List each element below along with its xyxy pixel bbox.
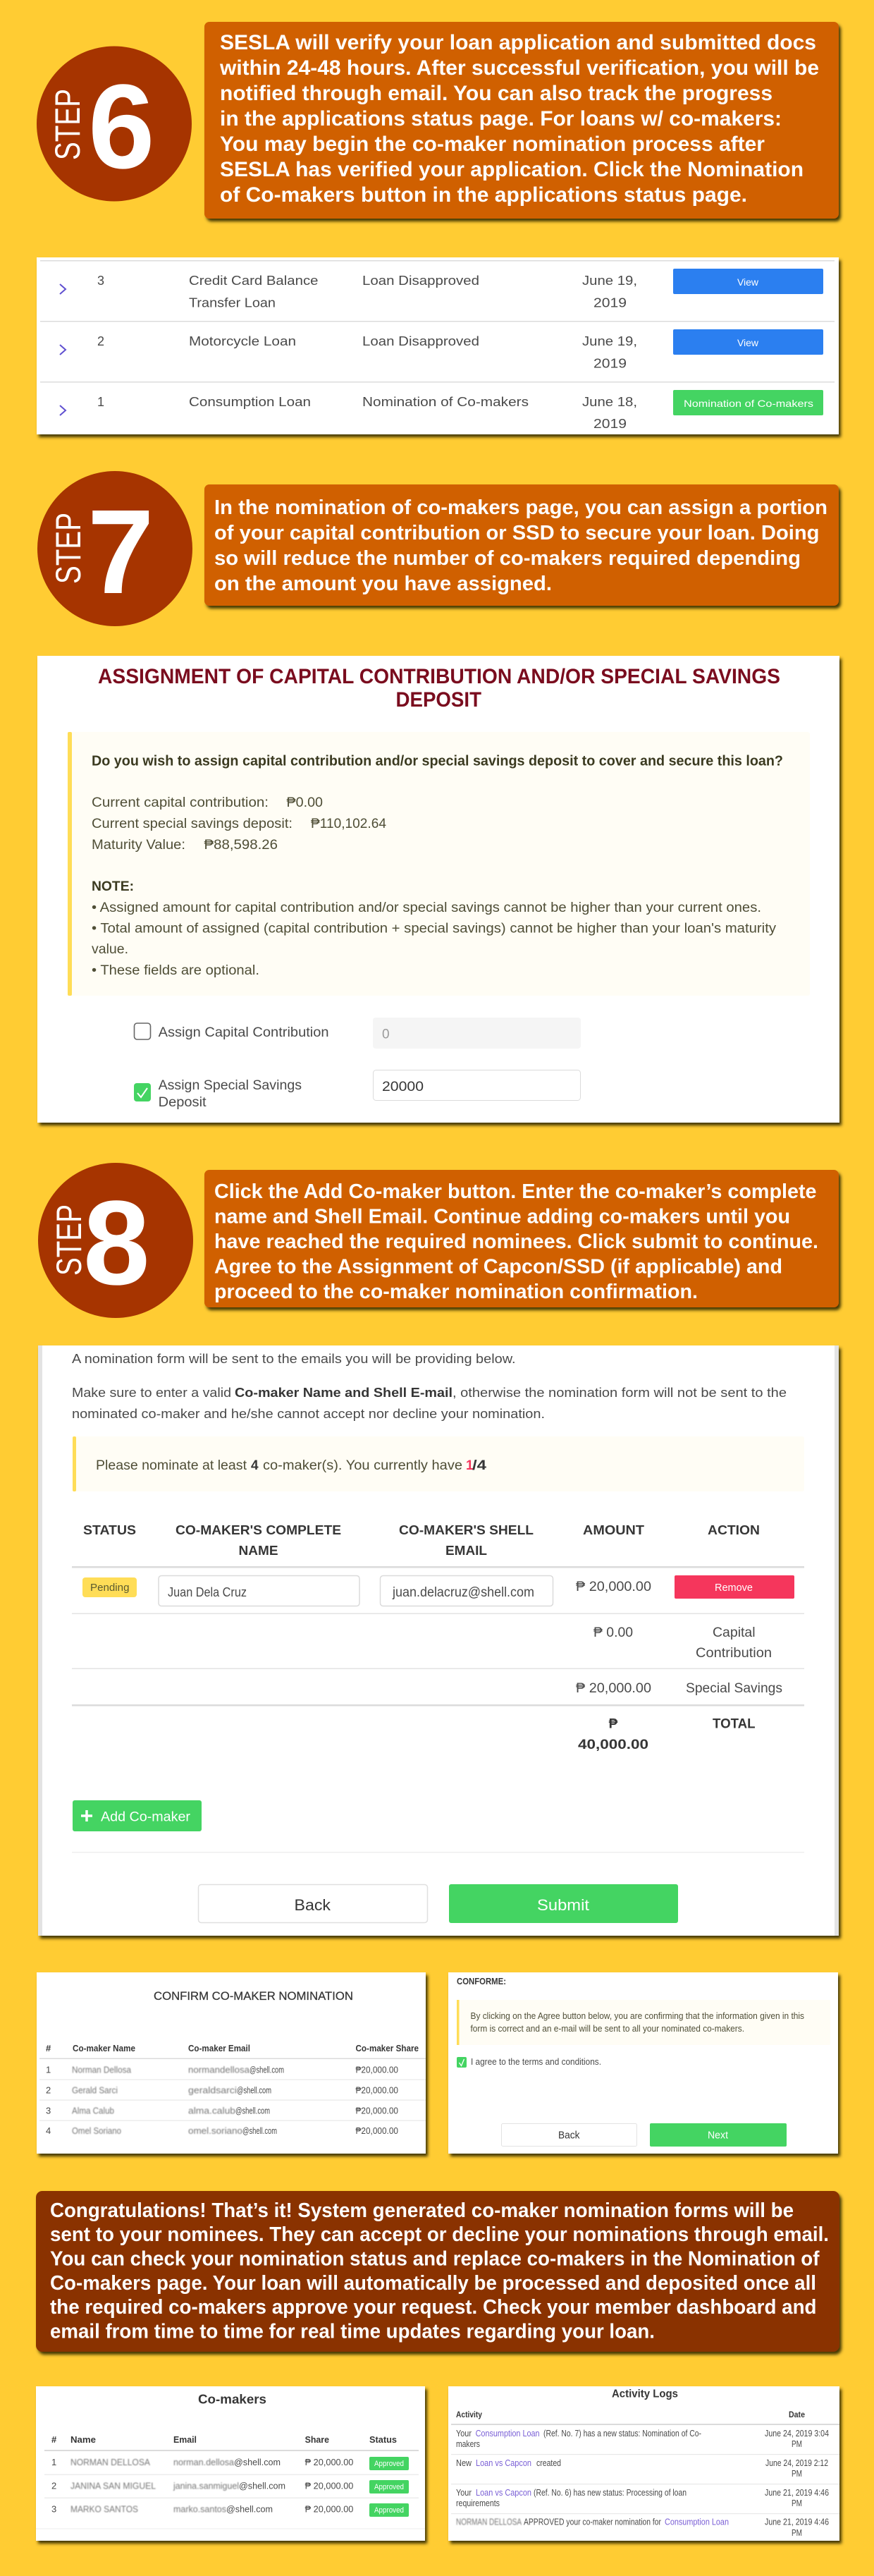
table row: pending co-maker: Remove (715, 1582, 753, 1594)
table row 2: @shell.com (237, 2084, 271, 2096)
table row 3: 3 (51, 2503, 56, 2515)
row: consumption loan: Nomination of Co-makers (362, 395, 529, 409)
panel: co-makers approved list (36, 2386, 425, 2541)
log row 4: Consumption Loan (665, 2516, 729, 2527)
panel heading: CONFIRM CO-MAKER NOMINATION (154, 1989, 353, 2003)
terms checkbox: I agree to the terms and conditions. (471, 2056, 601, 2067)
table header: Name (70, 2434, 96, 2445)
step 8 badge: 8 (83, 1176, 150, 1310)
step 8 badge (38, 1163, 193, 1318)
log row 3: June 21, 2019 4:46 (765, 2487, 829, 2498)
step 8 instruction box: have reached the required nominees. Click submit to continue. (214, 1231, 818, 1253)
table row 2: Approved (374, 2483, 404, 2491)
log row 4: NORMAN DELLOSA (456, 2516, 522, 2527)
table headings: EMAIL (445, 1544, 487, 1558)
step 7 instruction box: on the amount you have assigned. (214, 573, 552, 595)
notice box: value. (92, 942, 128, 957)
table row 1 (44, 2457, 419, 2475)
notice box: NOTE: (92, 879, 134, 894)
table row: pending co-maker: juan.delacruz@shell.com (392, 1585, 534, 1600)
table headings: NAME (238, 1544, 278, 1558)
field: assign capital contribution: Assign Capital Contribution (159, 1025, 329, 1040)
table row 1: Norman Dellosa (72, 2065, 132, 2075)
step 6 instruction box: of Co-makers button in the applications status page. (220, 183, 747, 207)
row: consumption loan: 2019 (593, 417, 627, 431)
panel heading (98, 665, 780, 712)
panel heading: Co-makers (198, 2392, 266, 2406)
step 6 instruction box: notified through email. You can also track the progress (220, 82, 773, 105)
table row 3: ₱ 20,000.00 (305, 2503, 353, 2515)
table header: Date (789, 2410, 805, 2419)
notice box (68, 732, 810, 996)
step 6 instruction box: SESLA will verify your loan application and submitted docs (220, 31, 816, 54)
table row 4: Omel Soriano (72, 2125, 121, 2136)
table header: Co-maker Email (188, 2043, 250, 2053)
row: motorcycle loan: Motorcycle Loan (189, 334, 296, 348)
field: assign capital contribution: 0 (382, 1027, 390, 1042)
log row 1: PM (792, 2438, 802, 2449)
submit button: Submit (537, 1896, 589, 1914)
table row 1: NORMAN DELLOSA (70, 2457, 150, 2467)
panel: applications status table (37, 257, 839, 434)
table row: total: TOTAL (713, 1716, 756, 1732)
congratulations box: Congratulations! That’s it! System generated co-maker nomination forms will be (50, 2199, 794, 2222)
log row 2 (451, 2458, 839, 2484)
table header (39, 2043, 426, 2059)
log row 1 (451, 2428, 839, 2455)
row: credit card balance transfer loan: Credit Card Balance (189, 274, 319, 288)
step 8 instruction box: proceed to the co-maker nomination confirmation. (214, 1281, 698, 1303)
log row 1: makers (456, 2438, 480, 2449)
row: credit card balance transfer loan: Transfer Loan (189, 296, 276, 310)
log row 4: PM (792, 2527, 802, 2538)
table row 2: janina.sanmiguel (173, 2481, 239, 2491)
log row 2: Loan vs Capcon (476, 2458, 531, 2468)
step 8 instruction box (204, 1170, 839, 1307)
step 6 instruction box: SESLA has verified your application. Click the Nomination (220, 158, 804, 181)
congratulations box (36, 2191, 839, 2352)
step 6 badge: 6 (88, 60, 155, 194)
field: assign capital contribution (134, 1018, 581, 1049)
row: consumption loan (60, 390, 823, 431)
table row 2: ₱ 20,000.00 (305, 2481, 353, 2491)
step 7 badge: 7 (87, 485, 154, 619)
table row: pending co-maker: Juan Dela Cruz (168, 1585, 247, 1599)
step 8 instruction box: Click the Add Co-maker button. Enter the co-maker’s complete (214, 1180, 816, 1203)
table row 3 (36, 2503, 425, 2529)
notice box: Current special savings deposit: (92, 817, 293, 831)
table row 3: alma.calub (188, 2106, 235, 2116)
table row 4: ₱20,000.00 (355, 2125, 398, 2136)
table row 2: 2 (46, 2084, 51, 2096)
notice box: • Assigned amount for capital contribution and/or special savings cannot be higher than your current ones. (92, 901, 761, 915)
table row 1: @shell.com (250, 2065, 284, 2075)
step 6 badge: STEP (48, 89, 87, 160)
panel heading: ASSIGNMENT OF CAPITAL CONTRIBUTION AND/OR SPECIAL SAVINGS (98, 665, 780, 688)
table row: capital contribution (72, 1625, 804, 1669)
table row: special savings: ₱ 20,000.00 (576, 1681, 651, 1696)
add co-maker button (73, 1800, 202, 1831)
back button: Back (295, 1896, 331, 1914)
log row 3 (451, 2487, 839, 2514)
table row: capital contribution: Capital (713, 1625, 756, 1640)
table row 1: 1 (51, 2457, 56, 2467)
step 6 instruction box: within 24-48 hours. After successful verification, you will be (219, 56, 819, 80)
step 6 badge (37, 47, 192, 202)
table row: total: ₱ (609, 1716, 618, 1732)
table row 1: @shell.com (234, 2457, 281, 2467)
table row 1: ₱20,000.00 (355, 2065, 398, 2075)
step 8 instruction box: name and Shell Email. Continue adding co-makers until you (214, 1206, 790, 1228)
table row 4: omel.soriano (188, 2125, 242, 2136)
back button: Back (558, 2130, 580, 2141)
step 6 instruction box: You may begin the co-maker nomination process after (220, 133, 765, 156)
table row 3: marko.santos (173, 2503, 226, 2515)
table row 1: normandellosa (188, 2065, 250, 2075)
next button: Next (708, 2130, 729, 2141)
table row 1: norman.dellosa (173, 2457, 235, 2467)
table row: pending co-maker (72, 1575, 804, 1614)
panel: co-maker nomination form (38, 1345, 839, 1936)
log row 4 (456, 2516, 829, 2538)
table header (44, 2434, 419, 2451)
row: consumption loan: Consumption Loan (189, 395, 311, 409)
row: motorcycle loan: View (737, 337, 759, 348)
nomination count notice: 4 (251, 1458, 259, 1473)
table header: # (46, 2043, 51, 2053)
row: credit card balance transfer loan: 2019 (593, 296, 627, 310)
add co-maker button: Add Co-maker (101, 1809, 191, 1825)
log row 2: PM (792, 2468, 802, 2479)
intro text: Co-maker Name and Shell E-mail (235, 1386, 453, 1400)
row: credit card balance transfer loan: June 19, (582, 274, 637, 288)
nomination count notice: co-maker(s). You currently have (263, 1458, 462, 1473)
submit button (449, 1884, 678, 1923)
table row 4: @shell.com (242, 2125, 277, 2136)
table row: special savings: Special Savings (686, 1681, 782, 1696)
table row 3: @shell.com (226, 2503, 273, 2515)
panel: activity logs (448, 2386, 839, 2541)
table header: Co-maker Share (355, 2043, 419, 2053)
log row 2: New (456, 2458, 472, 2468)
log row 4: APPROVED your co-maker nomination for (524, 2516, 662, 2527)
table row 4 (46, 2125, 398, 2136)
next button (650, 2123, 787, 2147)
table header: Share (305, 2434, 329, 2445)
step 7 badge (37, 471, 192, 626)
field: assign special savings deposit: Assign Special Savings (159, 1078, 302, 1093)
row: motorcycle loan: 2 (97, 334, 104, 348)
agreement notice (457, 2000, 830, 2045)
field: assign special savings deposit: 20000 (382, 1080, 424, 1094)
step 7 instruction box (204, 484, 839, 606)
field: assign special savings deposit (134, 1070, 581, 1110)
step 6 instruction box: in the applications status page. For loans w/ co-makers: (220, 107, 782, 130)
table row 1 (39, 2065, 426, 2080)
field: assign special savings deposit: Deposit (159, 1095, 207, 1110)
nomination count notice: Please nominate at least (96, 1458, 247, 1473)
row: motorcycle loan: June 19, (582, 334, 637, 348)
table row 3 (39, 2106, 426, 2121)
table row 3: MARKO SANTOS (70, 2503, 138, 2515)
log row 2: created (536, 2458, 561, 2468)
intro text: , otherwise the nomination form will not be sent to the (453, 1386, 787, 1400)
table row 2: @shell.com (239, 2481, 285, 2491)
table row 3: @shell.com (235, 2106, 270, 2116)
notice box: • Total amount of assigned (capital contribution + special savings) cannot be higher than your loan's maturity (92, 921, 777, 936)
step 7 instruction box: In the nomination of co-makers page, you can assign a portion (214, 496, 827, 519)
table row 2: Gerald Sarci (72, 2084, 118, 2096)
row: motorcycle loan (60, 329, 823, 371)
log row 1: Consumption Loan (476, 2428, 540, 2438)
conforme heading: CONFORME: (457, 1976, 506, 1986)
row: motorcycle loan: Loan Disapproved (362, 334, 479, 348)
log row 3: Loan vs Capcon (476, 2487, 531, 2498)
table headings: STATUS (83, 1523, 136, 1537)
panel: assignment of capital contribution form (37, 656, 839, 1123)
table row 2: JANINA SAN MIGUEL (70, 2481, 156, 2491)
intro text (72, 1352, 787, 1421)
notice box: ₱88,598.26 (204, 838, 278, 853)
row: consumption loan: Nomination of Co-makers (684, 398, 813, 409)
table row: capital contribution: ₱ 0.00 (593, 1625, 633, 1640)
panel: confirm co-maker nomination (37, 1972, 426, 2154)
table row 3: 3 (46, 2106, 51, 2116)
table header: # (51, 2434, 57, 2445)
table headings (72, 1523, 804, 1568)
notice box: ₱0.00 (286, 795, 323, 810)
congratulations box: sent to your nominees. They can accept or decline your nominations through email. (50, 2223, 829, 2246)
congratulations box: Co-makers page. Your loan will automatically be processed and deposited once all (50, 2272, 816, 2295)
log row 3: (Ref. No. 6) has new status: Processing of loan (534, 2487, 687, 2498)
panel heading: DEPOSIT (396, 688, 481, 712)
log row 4: June 21, 2019 4:46 (765, 2516, 829, 2527)
intro text: A nomination form will be sent to the emails you will be providing below. (72, 1352, 516, 1366)
table row 2: geraldsarci (188, 2084, 237, 2096)
log row 3: Your (456, 2487, 472, 2498)
table headings: CO-MAKER'S COMPLETE (176, 1523, 341, 1537)
agreement notice: form is correct and an e-mail will be sent to all your nominated co-makers. (471, 2023, 744, 2034)
panel heading: Activity Logs (612, 2388, 678, 2400)
notice box: Maturity Value: (92, 838, 185, 853)
table headings: ACTION (708, 1523, 760, 1537)
congratulations box: email from time to time for real time updates regarding your loan. (50, 2320, 655, 2343)
row: consumption loan: June 18, (582, 395, 637, 409)
log row 1: Your (456, 2428, 472, 2438)
table header: Activity (456, 2410, 482, 2419)
table header (451, 2410, 839, 2425)
table headings: CO-MAKER'S SHELL (399, 1523, 534, 1537)
step 7 instruction box: so will reduce the number of co-makers required depending (214, 547, 801, 570)
table row 3: Alma Calub (72, 2106, 114, 2116)
panel: conforme agreement (448, 1972, 838, 2154)
table row 2: 2 (51, 2481, 56, 2491)
log row 2: June 24, 2019 2:12 (765, 2458, 828, 2468)
row: credit card balance transfer loan: Loan Disapproved (362, 274, 479, 288)
table row: total: 40,000.00 (578, 1738, 648, 1752)
table row: capital contribution: Contribution (696, 1646, 772, 1661)
agreement notice: By clicking on the Agree button below, you are confirming that the information given in this (471, 2010, 804, 2021)
row: credit card balance transfer loan: View (737, 276, 759, 288)
back button (502, 2124, 637, 2147)
table row 3: Approved (374, 2506, 404, 2515)
table row 2 (44, 2480, 419, 2498)
step 7 instruction box: of your capital contribution or SSD to secure your loan. Doing (214, 522, 819, 544)
table row 2 (39, 2084, 426, 2101)
row: credit card balance transfer loan (60, 269, 823, 310)
step 7 badge: STEP (49, 513, 88, 584)
step 6 instruction box (204, 22, 839, 219)
table row: pending co-maker: Pending (90, 1582, 130, 1594)
notice box: Current capital contribution: (92, 795, 269, 810)
log row 3: PM (792, 2498, 802, 2508)
table header: Email (173, 2434, 197, 2445)
table header: Status (369, 2434, 397, 2445)
row: motorcycle loan: 2019 (593, 357, 627, 371)
row: credit card balance transfer loan: 3 (97, 274, 104, 288)
table row 1: ₱ 20,000.00 (305, 2457, 353, 2467)
table row 4: 4 (46, 2125, 51, 2136)
nomination count notice (73, 1436, 804, 1491)
table row 1: 1 (46, 2065, 51, 2075)
table row 1: Approved (374, 2460, 404, 2468)
congratulations box: You can check your nomination status and replace co-makers in the Nomination of (50, 2248, 820, 2271)
log row 1: (Ref. No. 7) has a new status: Nomination of Co- (543, 2428, 701, 2438)
back button (199, 1884, 427, 1922)
table headings: AMOUNT (583, 1523, 644, 1537)
notice box: • These fields are optional. (92, 963, 259, 978)
step 8 badge: STEP (49, 1204, 89, 1276)
nomination count notice: /4 (472, 1458, 487, 1473)
log row 1: June 24, 2019 3:04 (765, 2428, 829, 2438)
table header: Co-maker Name (73, 2043, 135, 2053)
row: consumption loan: 1 (97, 395, 104, 409)
notice box: ₱110,102.64 (311, 817, 386, 831)
intro text: nominated co-maker and he/she cannot accept nor decline your nomination. (72, 1407, 545, 1421)
table row 3: ₱20,000.00 (355, 2106, 398, 2116)
intro text: Make sure to enter a valid (72, 1386, 231, 1400)
notice box: Do you wish to assign capital contribution and/or special savings deposit to cover and secure this loan? (92, 753, 783, 769)
table row: total (578, 1716, 756, 1752)
table row: special savings (72, 1681, 804, 1707)
congratulations box: the required co-makers approve your request. Check your member dashboard and (50, 2296, 816, 2319)
log row 3: requirements (456, 2498, 500, 2508)
table row 2: ₱20,000.00 (355, 2084, 398, 2096)
table row: pending co-maker: ₱ 20,000.00 (576, 1580, 651, 1594)
step 8 instruction box: Agree to the Assignment of Capcon/SSD (if applicable) and (214, 1255, 782, 1278)
nomination count notice: 1 (466, 1458, 474, 1473)
